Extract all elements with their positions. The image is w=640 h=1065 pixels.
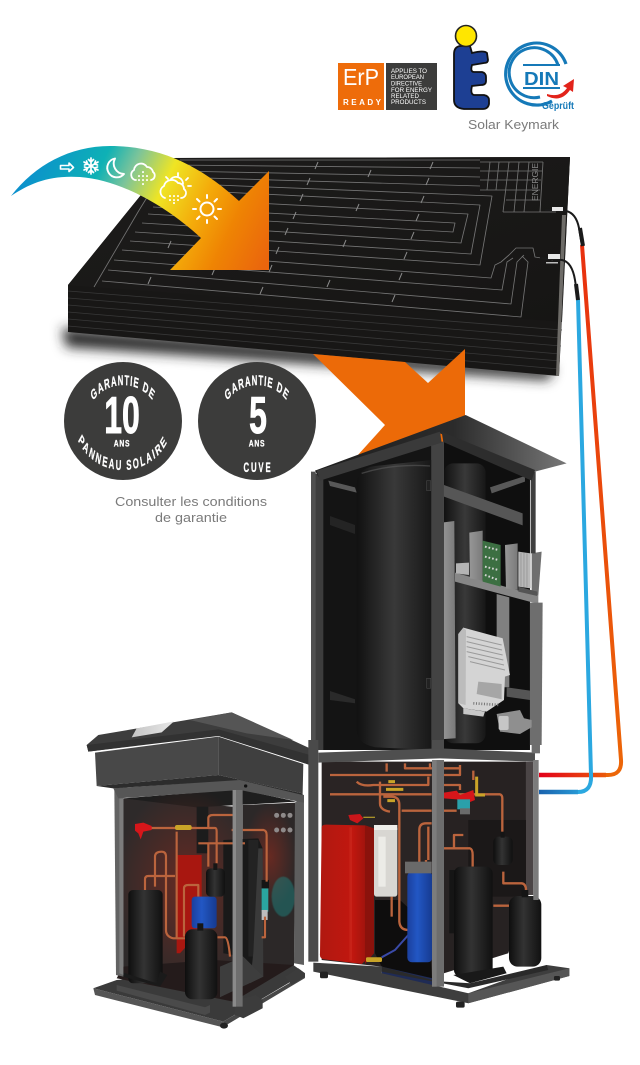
arrow: rainbow weather arrow (11, 146, 269, 270)
icon: wind arrow (60, 163, 74, 172)
small unit receivers and compressors (117, 863, 225, 999)
logo: ErP ready: APPLIES TO (391, 69, 427, 75)
valve assembly (497, 710, 532, 734)
icon: sun (193, 195, 221, 223)
badge: 5-year tank warranty: CUVE (243, 461, 273, 476)
icon: moon (107, 158, 124, 177)
black receiver (493, 832, 513, 865)
warranty note: Consulter les conditions (115, 494, 268, 509)
logo: ErP ready: RELATED (391, 94, 420, 100)
icon: cloud with snow (131, 164, 155, 184)
panel brand text: ENERGIE (531, 163, 540, 201)
logo: DIN Geprüft: Geprüft (542, 101, 575, 112)
icon: sun behind cloud with rain (160, 173, 191, 203)
white expansion vessel (374, 825, 397, 897)
small unit heat exchanger (177, 807, 269, 997)
small unit blue compressor (192, 897, 217, 928)
connectors and solar fluid pipes (539, 207, 621, 792)
arrow: orange arrow from panel to unit (313, 349, 465, 456)
warranty note: de garantie (155, 510, 227, 525)
tall unit frame (311, 442, 536, 750)
tall unit upper section (311, 415, 567, 750)
control unit (458, 628, 510, 717)
small unit frame (113, 779, 304, 1007)
small unit top box (95, 737, 303, 795)
icon: snowflake (84, 158, 98, 174)
black compressor (449, 867, 507, 983)
badge: 10-year solar panel warranty: ANS (114, 439, 130, 449)
badge: 5-year tank warranty: 5 (249, 387, 267, 445)
badge: 10-year solar panel warranty: PANNEAU SOLAIRE (78, 434, 167, 470)
logo: ErP ready: FOR ENERGY (391, 88, 432, 94)
logo: ErP ready: DIRECTIVE (391, 82, 422, 88)
logo: DIN Geprüft (506, 43, 575, 112)
second tank (444, 463, 486, 743)
badge: 10-year solar panel warranty: 10 (104, 387, 140, 445)
logo: Solar Keymark (454, 26, 489, 109)
small unit indicator dots (274, 813, 292, 832)
panel shadow (62, 328, 555, 380)
black accumulator (509, 890, 541, 967)
logo: ErP ready (338, 63, 437, 110)
label: Solar Keymark: Solar Keymark (468, 118, 560, 132)
lower copper pipes (330, 763, 526, 930)
tall unit rear bays (320, 442, 530, 750)
panel groove breaks (148, 162, 433, 302)
tall unit lower frame (308, 740, 540, 987)
lower section walls (322, 762, 533, 987)
shelf and mounts (442, 485, 543, 745)
tall unit lower section (308, 740, 569, 1008)
small unit base (93, 960, 305, 1029)
blue pipes (382, 935, 408, 957)
logo: ErP ready: PRODUCTS (391, 100, 426, 106)
small unit red valve (135, 823, 192, 839)
connector strip (518, 552, 537, 596)
warranty note (115, 494, 268, 525)
small unit copper pipes (145, 815, 267, 957)
panel grooves (94, 160, 556, 317)
logo: ErP ready: EUROPEAN (391, 75, 424, 81)
blue compressor (405, 862, 432, 962)
small outdoor unit (87, 712, 310, 1029)
badge: 10-year solar panel warranty (64, 362, 182, 480)
tall unit base (313, 963, 569, 1008)
logo: ErP ready: READY (343, 98, 382, 107)
badge: 10-year solar panel warranty: GARANTIE DE (90, 375, 156, 400)
tall unit roof (315, 415, 567, 481)
small unit lid (87, 712, 310, 765)
side braces (328, 476, 525, 703)
logo: DIN Geprüft: DIN (524, 69, 559, 89)
badge: 5-year tank warranty (198, 362, 316, 480)
circuit board (483, 541, 501, 587)
solar panel stack (68, 157, 570, 376)
badge: 5-year tank warranty: GARANTIE DE (224, 375, 290, 400)
red valve and fittings (348, 777, 485, 962)
panel layer edges (68, 291, 562, 369)
water tank (357, 460, 432, 750)
small unit interior (113, 787, 297, 1002)
logo: ErP ready: ErP (343, 64, 379, 90)
red buffer tank (320, 825, 374, 964)
badge: 5-year tank warranty: ANS (249, 439, 265, 449)
